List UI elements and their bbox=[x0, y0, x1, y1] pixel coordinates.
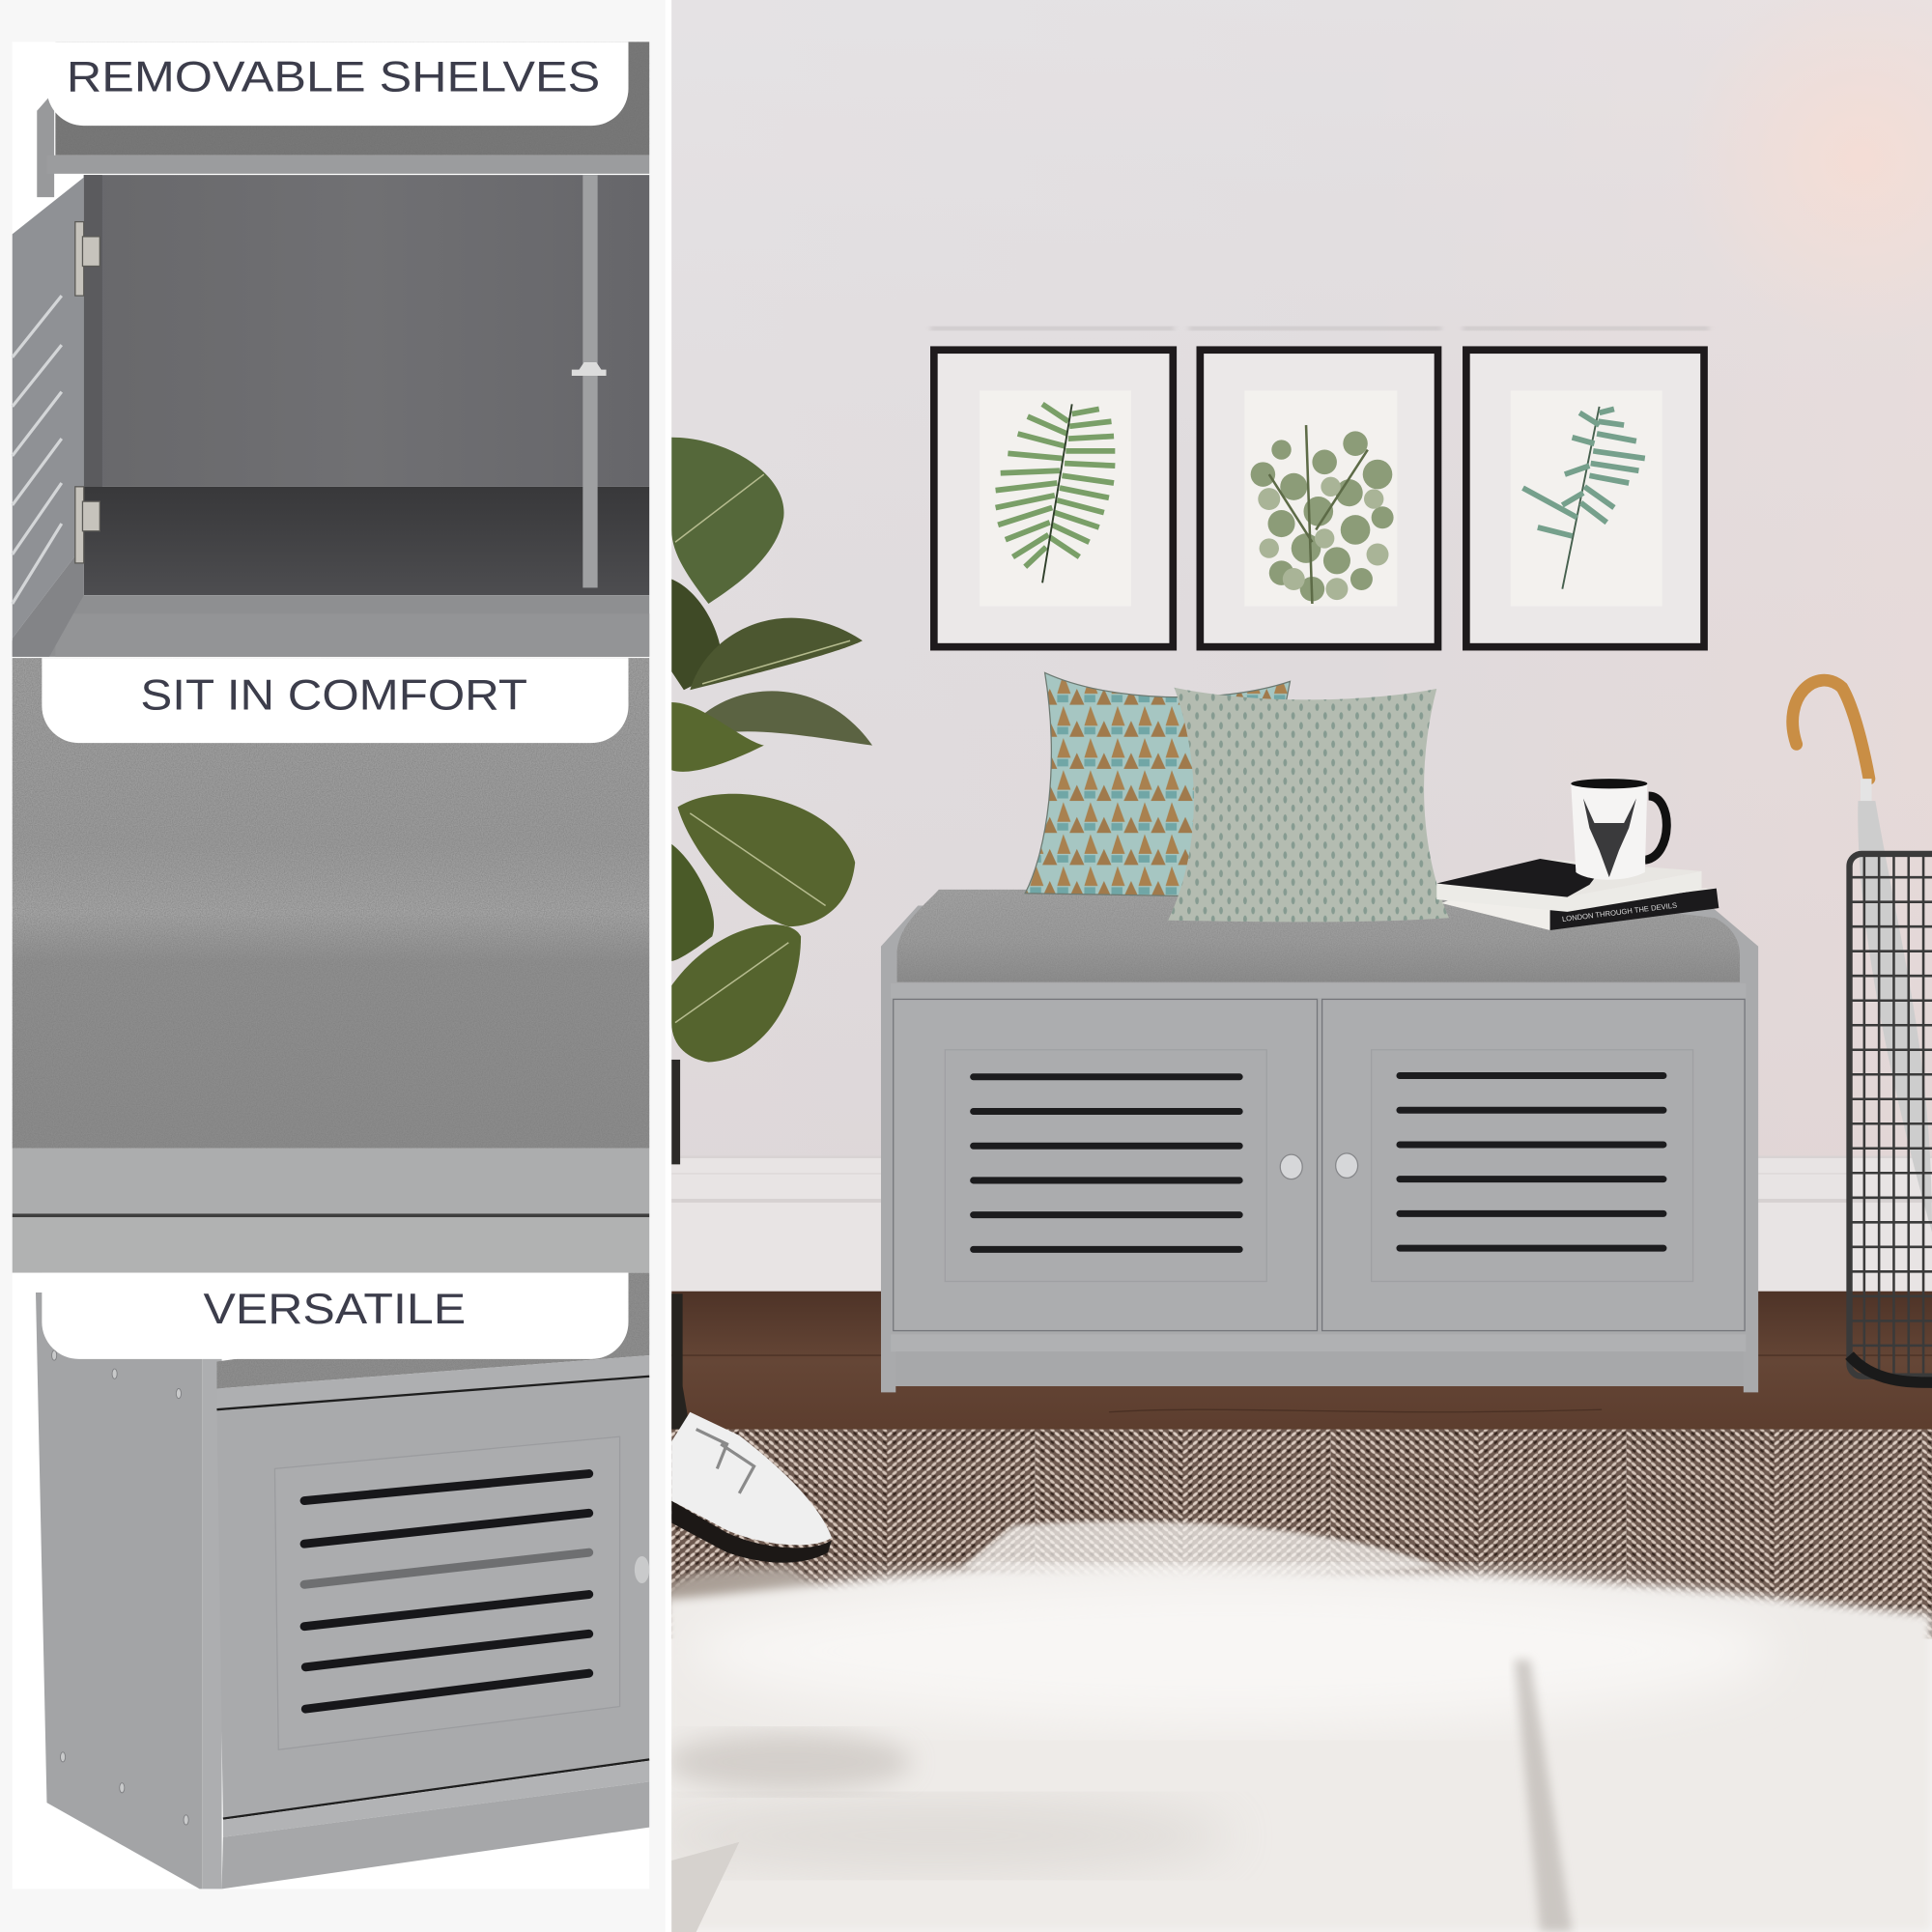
door top bbox=[13, 1217, 649, 1273]
stacked books bbox=[1436, 859, 1719, 930]
wood floor bbox=[671, 1292, 1932, 1432]
cushion bbox=[216, 1273, 649, 1389]
divider clip bbox=[572, 362, 607, 376]
door gap lines bbox=[216, 1377, 649, 1819]
door knob bbox=[635, 1556, 649, 1583]
hinges bbox=[75, 222, 99, 563]
left door bbox=[894, 999, 1318, 1331]
bench cushion bbox=[897, 890, 1740, 982]
baseboard bbox=[671, 1155, 1932, 1292]
panel: lifestyle photo bbox=[640, 0, 1932, 1932]
door bbox=[216, 1377, 649, 1819]
plinth bbox=[222, 1781, 649, 1889]
white sneaker bbox=[671, 1412, 832, 1563]
framed print: palm leaf bbox=[930, 346, 1177, 650]
umbrella bbox=[1793, 680, 1932, 1233]
stacked books: LONDON THROUGH THE DEVILS bbox=[1561, 901, 1678, 923]
side peg holes bbox=[52, 1350, 188, 1825]
wire umbrella basket bbox=[1850, 854, 1932, 1382]
door knobs bbox=[1280, 1153, 1358, 1179]
storage bench bbox=[881, 890, 1758, 1392]
label: removable shelves: REMOVABLE SHELVES bbox=[67, 53, 600, 100]
top rail bbox=[46, 156, 649, 174]
rail under cushion bbox=[216, 1355, 649, 1410]
panel base bbox=[13, 42, 649, 657]
louvre slats bbox=[304, 1474, 589, 1709]
picture ledge lines bbox=[930, 327, 1709, 330]
side post bbox=[37, 91, 54, 197]
label: sit in comfort: SIT IN COMFORT bbox=[140, 672, 527, 720]
deer mug bbox=[1571, 778, 1666, 880]
label: versatile bbox=[42, 1273, 629, 1359]
panel: sit in comfort bbox=[13, 658, 649, 1273]
pillow: teal and gold bbox=[1025, 672, 1290, 897]
open door bbox=[13, 178, 84, 657]
side panel bbox=[36, 1293, 202, 1889]
gap line bbox=[13, 1213, 649, 1217]
fig plant bbox=[671, 438, 872, 1430]
plinth bbox=[895, 1351, 1744, 1386]
panel: removable shelves bbox=[13, 42, 649, 657]
panel base bbox=[13, 1273, 649, 1889]
label: versatile: VERSATILE bbox=[203, 1286, 466, 1333]
base rail bbox=[223, 1761, 649, 1837]
right door bbox=[1322, 999, 1745, 1331]
bottom board bbox=[13, 595, 649, 657]
wall bbox=[671, 0, 1932, 1293]
interior floor bbox=[84, 487, 649, 595]
cushion fabric bbox=[13, 658, 649, 1149]
label: sit in comfort bbox=[42, 658, 629, 743]
panel: versatile bbox=[13, 1273, 649, 1889]
interior left shadow bbox=[84, 175, 102, 487]
woven rug bbox=[671, 1430, 1932, 1638]
seat cushion bbox=[55, 42, 649, 156]
framed print: eucalyptus bbox=[1197, 346, 1441, 650]
interior back bbox=[84, 175, 649, 487]
bottom rail bbox=[891, 1334, 1746, 1351]
divider bbox=[582, 175, 598, 587]
top rail bbox=[891, 983, 1746, 998]
label: removable shelves bbox=[13, 42, 629, 126]
bench body bbox=[881, 906, 1758, 1392]
fur rug bbox=[640, 1521, 1932, 1932]
framed print: fern sprig bbox=[1463, 346, 1708, 650]
white gutter bbox=[666, 0, 671, 1932]
louvre inset bbox=[274, 1436, 620, 1749]
front post bbox=[202, 1337, 222, 1889]
pillow: spotted sage bbox=[1168, 688, 1449, 922]
front board bbox=[13, 1149, 649, 1213]
